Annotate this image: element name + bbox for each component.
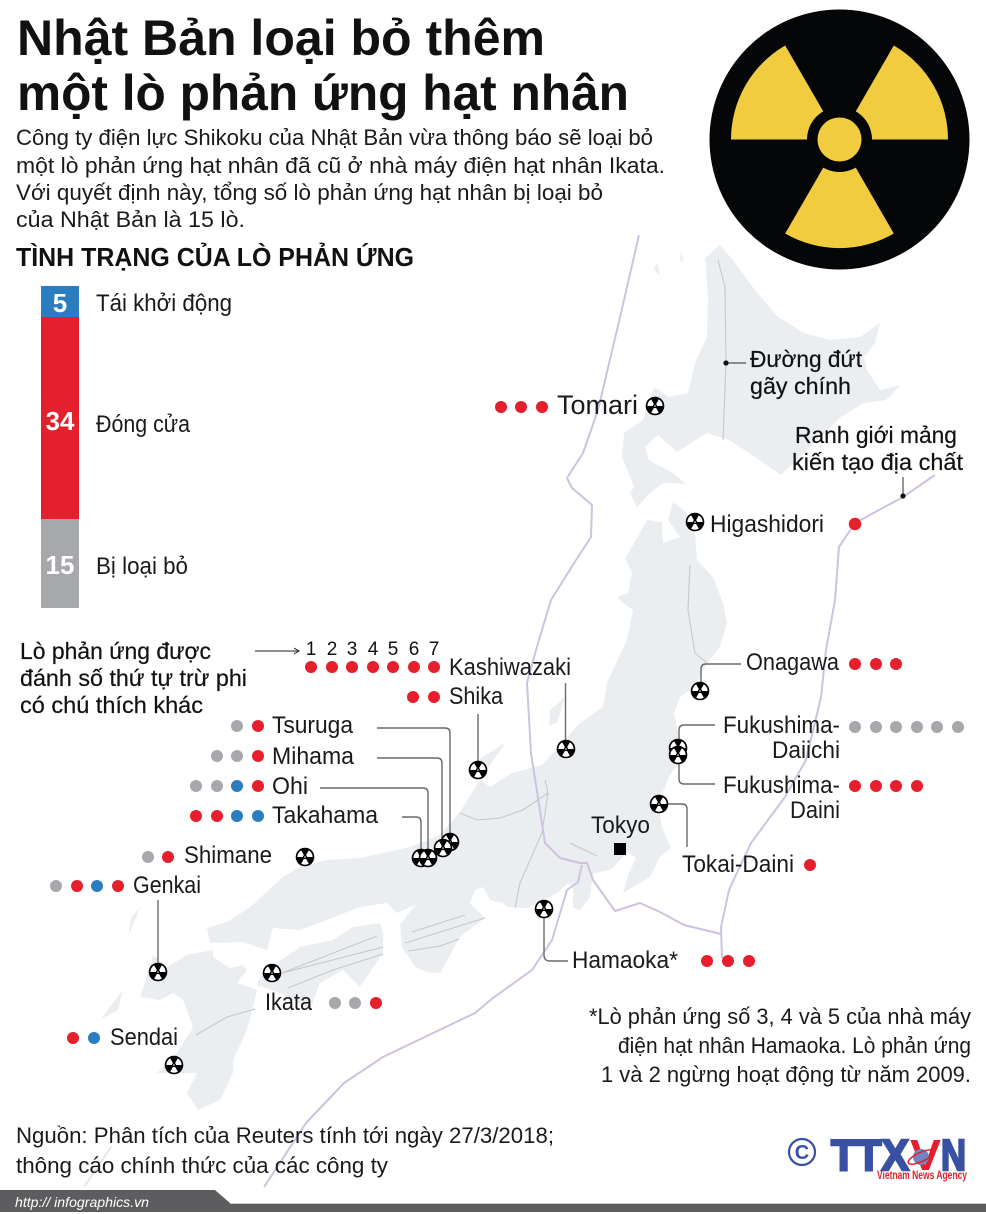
label: tectonic plate boundary: Ranh giới mảng xyxy=(795,422,957,448)
footnote: Hamaoka: *Lò phản ứng số 3, 4 và 5 của nhà máy xyxy=(589,1004,971,1029)
plant: Sendai: Sendai xyxy=(110,1024,178,1051)
plant: Tokai-Daini xyxy=(650,795,816,878)
leader lines xyxy=(158,363,903,965)
segment: restarted 5: 5 xyxy=(53,288,67,318)
icons: Wakasa Bay plants xyxy=(412,833,459,867)
plant: Ohi xyxy=(190,773,308,800)
footer bar xyxy=(0,1190,986,1212)
label: tectonic plate boundary: kiến tạo địa chất xyxy=(792,449,964,475)
segment: restarted 5 xyxy=(41,286,232,318)
intro text: Với quyết định này, tổng số lò phản ứng hạt nhân bị loại bỏ xyxy=(16,180,603,205)
plant: Takahama: Takahama xyxy=(272,802,379,829)
logo: TTXVN: TTX xyxy=(831,1131,909,1180)
label: main fault line: gãy chính xyxy=(750,373,851,399)
plant: Mihama: Mihama xyxy=(272,743,355,770)
plant: Fukushima-Daiichi: Daiichi xyxy=(772,737,840,764)
note on reactor numbering: có chú thích khác xyxy=(20,692,203,718)
main fault lines xyxy=(196,260,726,1035)
footnote: Hamaoka xyxy=(589,1004,971,1087)
plant: Tomari: Tomari xyxy=(557,390,638,420)
plant: Ohi: Ohi xyxy=(272,773,308,800)
segment: shut down 34 xyxy=(41,317,191,519)
map of Japan xyxy=(84,235,935,1187)
title: một lò phản ứng hạt nhân xyxy=(17,65,629,121)
title: Nhật Bản loại bỏ thêm xyxy=(17,10,545,66)
reactor numbers 1 to 7: 1 xyxy=(306,639,316,660)
plant: Sendai xyxy=(67,1024,183,1074)
icon: large radiation symbol xyxy=(710,10,970,270)
note on reactor numbering: đánh số thứ tự trừ phi xyxy=(20,665,247,691)
logo: TTXVN xyxy=(789,1131,967,1182)
plant: Shimane: Shimane xyxy=(184,842,272,869)
logo: TTXVN: N xyxy=(941,1131,966,1180)
arrow to reactor numbers xyxy=(255,648,299,654)
city: Tokyo xyxy=(591,812,650,855)
plant: Tomari xyxy=(495,390,664,420)
footer bar: http:// infographics.vn xyxy=(15,1194,149,1210)
reactor numbers 1 to 7: 5 xyxy=(388,639,398,660)
plant: Shimane xyxy=(142,842,314,869)
segment: restarted 5: Tái khởi động xyxy=(96,290,232,317)
plant: Fukushima-Daini: Daini xyxy=(790,797,840,824)
reactor numbers 1 to 7 xyxy=(306,639,439,660)
stacked bar chart: reactor status xyxy=(41,286,232,608)
plant: Hamaoka xyxy=(535,900,755,974)
tectonic plate boundaries xyxy=(84,235,935,1187)
plant: Kashiwazaki xyxy=(305,654,575,758)
plant: Fukushima-Daiichi xyxy=(669,712,964,764)
reactor numbers 1 to 7: 6 xyxy=(409,639,419,660)
segment: decommissioned 15: 15 xyxy=(46,550,74,580)
plant: Shika: Shika xyxy=(449,683,504,710)
plant: Mihama xyxy=(211,743,355,770)
intro text: của Nhật Bản là 15 lò. xyxy=(16,207,245,232)
plant: Genkai: Genkai xyxy=(133,872,201,899)
landmass xyxy=(100,245,901,1110)
segment: shut down 34: 34 xyxy=(46,406,75,436)
plant: Shika xyxy=(407,683,504,779)
plant: Kashiwazaki: Kashiwazaki xyxy=(449,654,571,681)
heading: reactor status: TÌNH TRẠNG CỦA LÒ PHẢN ỨNG xyxy=(16,241,414,272)
reactor numbers 1 to 7: 7 xyxy=(429,639,439,660)
reactor numbers 1 to 7: 3 xyxy=(347,639,357,660)
segment: shut down 34: Đóng cửa xyxy=(96,411,191,438)
plant: Higashidori: Higashidori xyxy=(710,511,824,538)
plant: Tokai-Daini: Tokai-Daini xyxy=(682,851,794,878)
intro text: một lò phản ứng hạt nhân đã cũ ở nhà máy điện hạt nhân Ikata. xyxy=(16,153,665,178)
plant: Onagawa xyxy=(691,649,902,700)
plant: Tsuruga: Tsuruga xyxy=(272,712,354,739)
intro text xyxy=(16,125,665,232)
plant: Ikata: Ikata xyxy=(265,989,313,1016)
plant: Tsuruga xyxy=(231,712,354,739)
footnote: Hamaoka: điện hạt nhân Hamaoka. Lò phản ứng xyxy=(618,1033,971,1058)
plant: Fukushima-Daini xyxy=(669,746,923,824)
reactor numbers 1 to 7: 4 xyxy=(368,639,379,660)
plant: Takahama xyxy=(190,802,379,829)
city: Tokyo: Tokyo xyxy=(591,812,650,839)
plant: Fukushima-Daiichi: Fukushima- xyxy=(723,712,840,739)
label: main fault line xyxy=(750,346,863,399)
title xyxy=(17,10,629,121)
segment: decommissioned 15 xyxy=(41,519,188,608)
plant: Ikata xyxy=(263,964,382,1016)
logo: TTXVN: C xyxy=(795,1142,809,1164)
footnote: Hamaoka: 1 và 2 ngừng hoạt động từ năm 2009. xyxy=(601,1062,971,1087)
label: tectonic plate boundary xyxy=(792,422,964,475)
source: thông cáo chính thức của các công ty xyxy=(16,1153,388,1178)
plant: Hamaoka: Hamaoka* xyxy=(572,947,678,974)
note on reactor numbering: Lò phản ứng được xyxy=(20,638,211,664)
label: main fault line: Đường đứt xyxy=(750,346,863,372)
intro text: Công ty điện lực Shikoku của Nhật Bản vừa thông báo sẽ loại bỏ xyxy=(16,125,653,150)
reactor numbers 1 to 7: 2 xyxy=(327,639,337,660)
note on reactor numbering xyxy=(20,638,247,718)
source xyxy=(16,1123,554,1178)
logo: TTXVN: V xyxy=(910,1131,942,1180)
segment: decommissioned 15: Bị loại bỏ xyxy=(96,553,188,580)
leader end dots xyxy=(723,360,906,499)
plant: Genkai xyxy=(50,872,201,981)
source: Nguồn: Phân tích của Reuters tính tới ngày 27/3/2018; xyxy=(16,1123,554,1148)
plant: Onagawa: Onagawa xyxy=(746,649,840,676)
plant: Fukushima-Daini: Fukushima- xyxy=(723,772,840,799)
plant: Higashidori xyxy=(686,511,861,538)
